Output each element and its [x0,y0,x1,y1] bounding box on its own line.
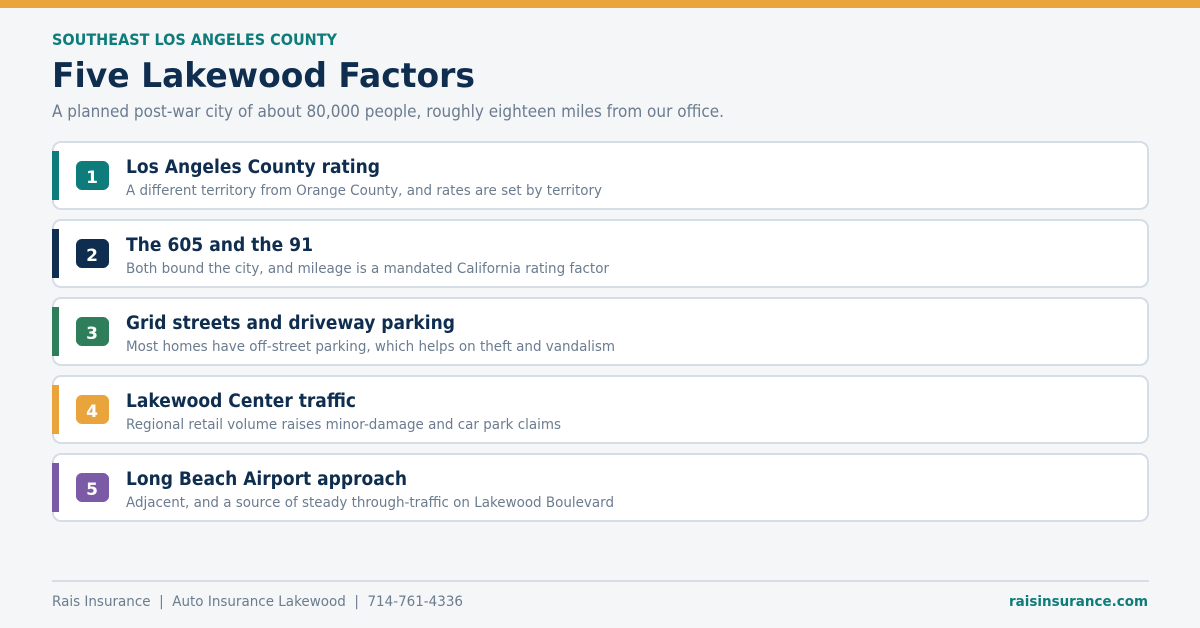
badge 3 [76,317,109,346]
accent bar 1 [52,151,59,200]
eyebrow: SOUTHEAST LOS ANGELES COUNTY [52,30,337,49]
panel: factor 5 [52,454,1148,521]
subtitle: A planned post-war city of about 80,000 people, roughly eighteen miles from our office. [52,102,724,122]
description 1: A different territory from Orange County, and rates are set by territory [126,183,602,199]
badge 1: 1 [86,168,98,188]
accent bar 2 [52,229,59,278]
footer contact line: Rais Insurance | Auto Insurance Lakewood | 714-761-4336 [52,594,463,610]
badge 4: 4 [86,402,98,422]
accent bar 4 [52,385,59,434]
heading 2: The 605 and the 91 [126,235,313,256]
description 5: Adjacent, and a source of steady through-traffic on Lakewood Boulevard [126,495,614,511]
badge 5 [76,473,109,502]
badge 5: 5 [86,480,98,500]
title: Five Lakewood Factors [52,56,475,96]
accent bar 3 [52,307,59,356]
badge 3: 3 [86,324,98,344]
heading 5: Long Beach Airport approach [126,469,407,490]
panel: factor 4 [52,376,1148,443]
badge 2: 2 [86,246,98,266]
panel: factor 2 [52,220,1148,287]
description 2: Both bound the city, and mileage is a mandated California rating factor [126,261,609,277]
heading 3: Grid streets and driveway parking [126,313,455,334]
accent bar 5 [52,463,59,512]
description 3: Most homes have off-street parking, which helps on theft and vandalism [126,339,615,355]
top accent bar [0,0,1200,8]
badge 4 [76,395,109,424]
badge 1 [76,161,109,190]
description 4: Regional retail volume raises minor-damage and car park claims [126,417,561,433]
panel: factor 3 [52,298,1148,365]
panel: factor 1 [52,142,1148,209]
footer website: raisinsurance.com [1009,594,1148,610]
heading 4: Lakewood Center traffic [126,391,356,412]
heading 1: Los Angeles County rating [126,157,380,178]
badge 2 [76,239,109,268]
